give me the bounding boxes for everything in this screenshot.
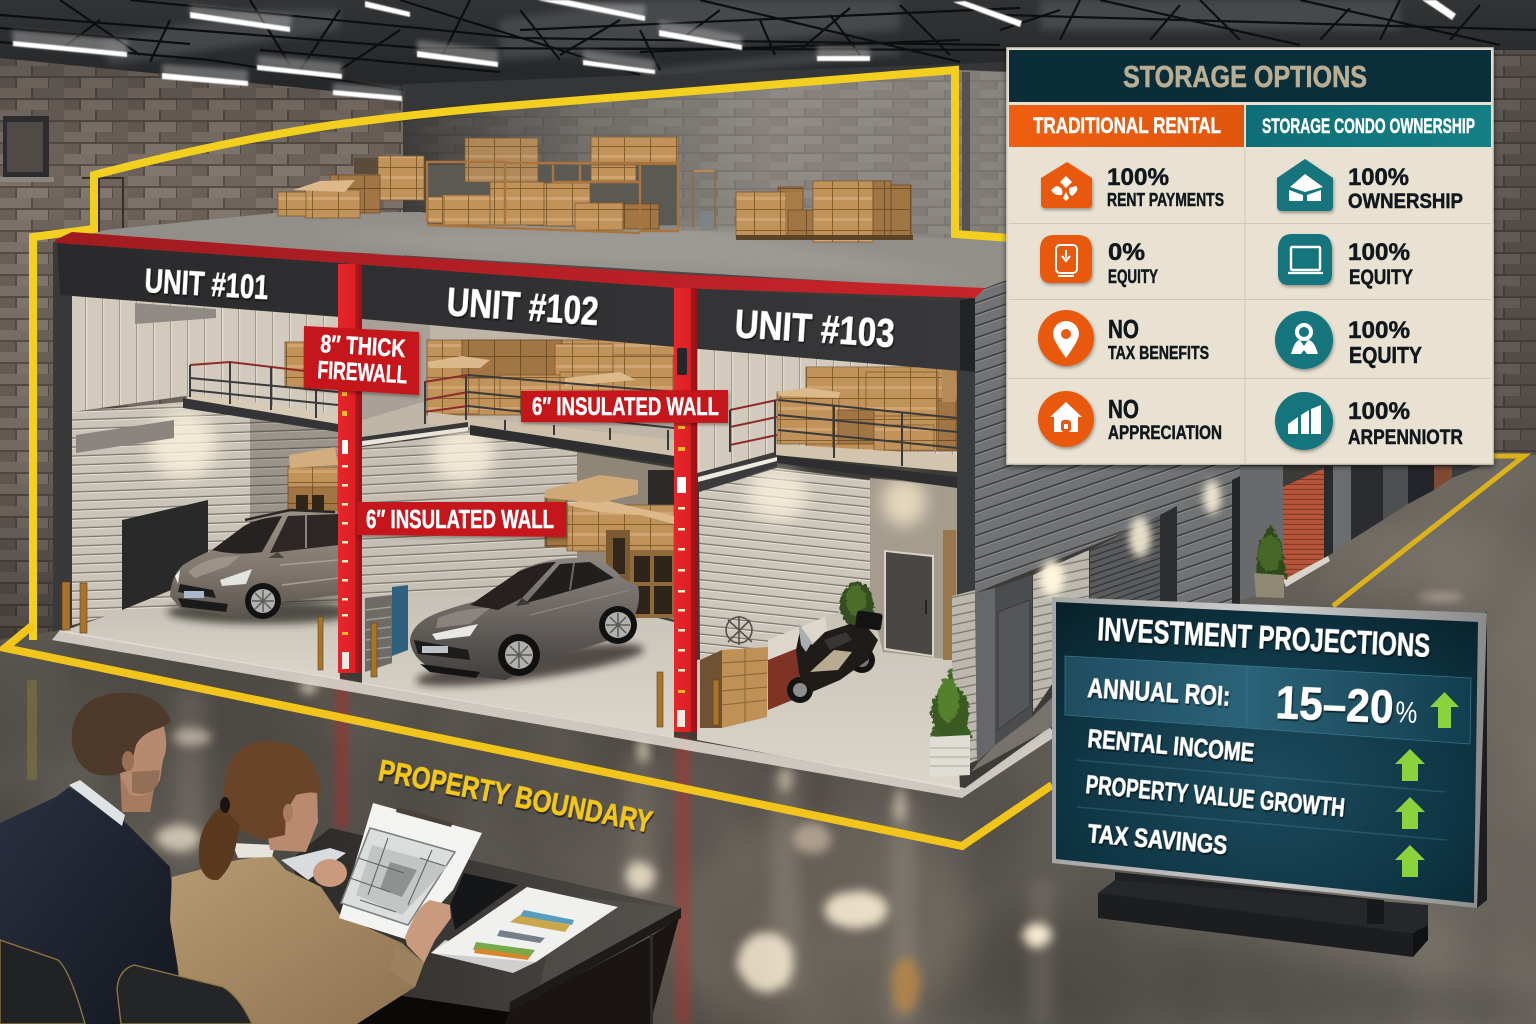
sign side edge bbox=[1477, 612, 1487, 908]
row 2 left: zero equity: EQUITY bbox=[1108, 267, 1158, 288]
unit 3 mezzanine floor bbox=[775, 444, 957, 472]
panel: storage options comparison bbox=[1007, 48, 1493, 464]
ROI percent sign: % bbox=[1395, 696, 1418, 730]
callout text line 1: 8″ THICK bbox=[320, 330, 406, 363]
bay lights bbox=[1040, 560, 1064, 596]
unit 1 car shadow bbox=[167, 600, 357, 624]
row 3 right: equity bbox=[1275, 311, 1422, 369]
tax savings label: TAX SAVINGS bbox=[1086, 818, 1229, 860]
property value growth label: PROPERTY VALUE GROWTH bbox=[1084, 769, 1346, 823]
unit 3 left beam bbox=[698, 455, 777, 492]
back wall upper level bbox=[403, 70, 1010, 240]
row 2 right: full equity: EQUITY bbox=[1349, 266, 1413, 289]
siding bay 6 bbox=[1383, 466, 1408, 520]
grey siding corner bbox=[975, 588, 995, 762]
unit 1 lower boxes and shelves bbox=[288, 447, 338, 517]
bay light 3 bbox=[1203, 480, 1221, 514]
unit label 101: UNIT #101 bbox=[144, 262, 270, 307]
icon: bar chart teal bbox=[1275, 392, 1333, 450]
man face bbox=[118, 720, 166, 796]
man neck bbox=[120, 772, 156, 812]
woman hair bbox=[224, 741, 321, 840]
wall window bbox=[0, 116, 54, 182]
row 4 left: no appreciation bbox=[1038, 391, 1222, 447]
side door bbox=[995, 575, 1032, 745]
sign screen bbox=[1056, 602, 1478, 903]
table bbox=[290, 828, 681, 1024]
unit 2 front beam bbox=[470, 425, 674, 465]
row 4 left: no appreciation: NO bbox=[1108, 394, 1139, 424]
warm central floor sheen bbox=[670, 820, 970, 1024]
row 3 left: no tax benefits: TAX BENEFITS bbox=[1108, 342, 1209, 363]
fascia right end bbox=[960, 298, 975, 372]
unit 2 back door bbox=[648, 470, 674, 510]
arrow: tax savings up bbox=[1395, 845, 1425, 877]
lower boundary bbox=[5, 625, 1052, 846]
grey floor strip under side door bbox=[971, 680, 1070, 772]
woman near arm and hand bbox=[390, 900, 451, 987]
white siding corner bbox=[952, 590, 977, 772]
panel title: STORAGE OPTIONS bbox=[1123, 59, 1367, 94]
row 1 left: rent payments bbox=[1041, 162, 1224, 210]
unit 3 side window bbox=[943, 530, 956, 660]
unit 3 back lower wall bbox=[870, 478, 957, 665]
right wall shade bbox=[1490, 50, 1536, 465]
icon: monitor teal bbox=[1278, 234, 1332, 285]
man suit bbox=[0, 787, 178, 1024]
dark roll door bbox=[1351, 466, 1383, 540]
woman bbox=[170, 741, 424, 1024]
row 4 left: no appreciation: APPRECIATION bbox=[1108, 423, 1222, 444]
steel trusses bbox=[0, 0, 1536, 90]
panel: investment projections sign bbox=[1052, 597, 1487, 957]
unit 2 blue bin bbox=[392, 585, 408, 656]
unit 3 beams bbox=[775, 455, 957, 488]
unit label 102: UNIT #102 bbox=[445, 280, 600, 334]
far orange door bbox=[1434, 466, 1452, 490]
floor sheen bbox=[300, 225, 985, 280]
siding bay 5 bbox=[1333, 466, 1351, 552]
wall shading overlay bbox=[0, 58, 403, 640]
icon: person teal bbox=[1275, 311, 1333, 369]
siding bay 3 bbox=[1177, 480, 1232, 620]
woman jacket bbox=[170, 855, 424, 1024]
upper concrete floor bbox=[60, 212, 1010, 290]
arrow: ROI up bbox=[1430, 692, 1459, 728]
arrow: rental income up bbox=[1395, 749, 1425, 781]
crates group C bbox=[736, 181, 913, 242]
lower callout text: 6″ INSULATED WALL bbox=[366, 504, 554, 534]
unit 3 railing bbox=[730, 400, 957, 466]
bollards bbox=[62, 582, 719, 727]
unit 1 mezzanine beam bbox=[183, 398, 338, 432]
unit 2 striped cabinet bbox=[365, 595, 392, 672]
sign frame bbox=[1052, 597, 1487, 908]
dark column bbox=[1160, 506, 1177, 620]
orange roll door bbox=[1283, 468, 1324, 580]
polished floor bbox=[0, 455, 1536, 1024]
small paper bbox=[281, 848, 346, 880]
right side building wall bbox=[930, 278, 1482, 777]
light tubes bbox=[13, 41, 127, 57]
small railing frame bbox=[82, 178, 123, 232]
icon: house diamonds orange bbox=[1041, 162, 1092, 208]
floor lip bbox=[52, 630, 1056, 798]
row 3 right: equity: EQUITY bbox=[1349, 342, 1422, 368]
people at table bbox=[0, 693, 681, 1024]
unit 2 railing bbox=[424, 375, 674, 450]
upper boundary bbox=[33, 70, 1010, 640]
unit 3 floor bbox=[697, 597, 960, 790]
sign base bbox=[1098, 872, 1428, 957]
floor texture bbox=[0, 455, 1536, 1024]
unit label 103: UNIT #103 bbox=[733, 302, 896, 356]
floor reflections bbox=[156, 520, 1490, 1024]
unit 2 mezzanine floor bbox=[428, 412, 674, 458]
firewall pillar 1 bbox=[338, 264, 362, 673]
entrance bush bbox=[1254, 525, 1287, 598]
woman hair tie bbox=[220, 797, 230, 813]
man ear bbox=[122, 751, 134, 771]
unit 2 interior bbox=[52, 232, 1482, 798]
column head: traditional rental bbox=[1009, 105, 1244, 147]
potted tree bbox=[930, 668, 972, 777]
side column bbox=[957, 292, 975, 596]
sign title: INVESTMENT PROJECTIONS bbox=[1097, 611, 1431, 664]
dark band above yellow line bbox=[403, 62, 1010, 122]
car 2 bbox=[410, 558, 646, 695]
crates group B with shelving bbox=[427, 137, 716, 233]
decorative band divider bbox=[1246, 667, 1248, 727]
icon: house teal bbox=[1277, 159, 1333, 211]
unit 3 white ledge bbox=[768, 617, 828, 660]
icon: device orange bbox=[1040, 235, 1092, 283]
dark left column bbox=[53, 242, 72, 632]
arrow: property value up bbox=[1395, 797, 1425, 829]
unit 1 wall plaques bbox=[135, 303, 216, 324]
faint left parking stripe bbox=[27, 680, 37, 780]
callout: 8 inch thick firewall bbox=[304, 326, 419, 395]
row 3 right: equity: 100% bbox=[1348, 317, 1410, 344]
ROI highlight band bbox=[1065, 656, 1471, 744]
lower right dark floor patch bbox=[900, 900, 1536, 1024]
column head: traditional rental: TRADITIONAL RENTAL bbox=[1033, 113, 1221, 138]
unit 1 upper wall bbox=[72, 292, 338, 430]
row 4 right: appreciation: ARPENNIOTR bbox=[1348, 426, 1463, 449]
side siding upper band bbox=[975, 278, 1240, 593]
callout text line 2: FIREWALL bbox=[317, 356, 408, 389]
upper storage level bbox=[60, 137, 1010, 290]
unit 2 wall glow bbox=[431, 427, 495, 483]
black unit fascia bbox=[57, 243, 972, 372]
unit 2 back upper bbox=[362, 318, 430, 420]
unit 3 side lower wall bbox=[699, 468, 870, 660]
bay light 2 bbox=[1129, 517, 1151, 557]
unit 3 back wall glow bbox=[882, 478, 926, 526]
light housings bbox=[12, 0, 870, 99]
man hair bbox=[72, 693, 171, 776]
unit 2 lower wall bbox=[362, 433, 577, 600]
chair right bbox=[117, 965, 252, 1024]
door bay dark bbox=[1324, 466, 1333, 558]
row 4 right: appreciation bbox=[1275, 392, 1463, 450]
unit 3 strip bbox=[698, 457, 777, 482]
unit 3 wall glow bbox=[747, 469, 807, 521]
row 1 right: ownership bbox=[1277, 159, 1463, 213]
callout: lower 6 inch insulated wall bbox=[357, 502, 566, 537]
car 1 bbox=[170, 510, 338, 619]
panel header bar bbox=[1009, 50, 1491, 102]
clipboard with blueprint bbox=[339, 803, 482, 940]
tablet bbox=[450, 873, 518, 930]
column head: storage condo ownership bbox=[1246, 105, 1491, 147]
unit 1 railing bbox=[190, 362, 338, 418]
firewall pillar 2 bbox=[674, 288, 697, 732]
unit 2 lower boxes and shelves bbox=[545, 475, 674, 618]
unit 1 wall glow bbox=[149, 411, 217, 479]
woman collar bbox=[232, 843, 275, 858]
lighter roof panels bbox=[100, 0, 1400, 80]
red parapet bbox=[55, 232, 985, 298]
unit 1 mezzanine boxes bbox=[285, 342, 304, 387]
icon: house circle orange bbox=[1038, 391, 1094, 447]
unit 3 red wall base bbox=[768, 634, 800, 710]
row 3 left: no tax benefits: NO bbox=[1108, 314, 1139, 344]
light curb bbox=[1283, 556, 1330, 587]
callout: upper 6 inch insulated wall bbox=[521, 390, 728, 423]
far door bbox=[1408, 466, 1434, 504]
chair left bbox=[0, 940, 85, 1024]
unit 3 door bbox=[884, 550, 934, 657]
motorcycle bbox=[787, 610, 883, 703]
floor label: property boundary: PROPERTY BOUNDARY bbox=[376, 753, 656, 839]
ROI value: 15–20 bbox=[1275, 676, 1395, 733]
unit 3 bush bbox=[840, 582, 874, 628]
red firewall pillars bbox=[62, 264, 719, 732]
man bbox=[0, 693, 178, 1024]
unit 3 wood crate bbox=[700, 647, 768, 728]
woman ear bbox=[283, 804, 293, 822]
row 3 left: no tax benefits bbox=[1038, 310, 1209, 366]
ceiling lights bbox=[12, 0, 1456, 101]
row 1 right: ownership: 100% bbox=[1348, 164, 1409, 191]
unit 3 wire rack bbox=[726, 616, 752, 645]
row 1 left: rent payments: 100% bbox=[1107, 164, 1169, 191]
unit 1 lower wall bbox=[72, 402, 338, 625]
man stubble bbox=[132, 770, 160, 794]
siding bay 4 bbox=[1240, 466, 1283, 600]
row 4 right: appreciation: 100% bbox=[1348, 398, 1410, 425]
row 2 left: zero equity bbox=[1040, 235, 1158, 288]
annual ROI label: ANNUAL ROI: bbox=[1087, 672, 1231, 712]
woman ponytail bbox=[199, 806, 240, 880]
roof fascia bbox=[55, 232, 985, 372]
row 2 left: zero equity: 0% bbox=[1108, 239, 1145, 266]
rental income label: RENTAL INCOME bbox=[1086, 723, 1255, 768]
upper callout text: 6″ INSULATED WALL bbox=[532, 393, 719, 421]
unit 1 shade bbox=[250, 412, 338, 610]
unit 3 mezzanine boxes bbox=[777, 367, 957, 451]
unit 2 white strip bbox=[362, 427, 468, 446]
unit 3 interior bbox=[52, 348, 1056, 798]
roll door bay bbox=[1090, 515, 1160, 640]
woman neck and cheek bbox=[262, 790, 318, 852]
corner pillar stripe bbox=[962, 72, 970, 232]
far end bbox=[1452, 466, 1482, 478]
icon: map pin orange bbox=[1038, 310, 1094, 366]
unit 2 beams bbox=[362, 422, 468, 447]
far right brick wall bbox=[1490, 50, 1536, 465]
back wall shadow bbox=[403, 70, 1010, 240]
white siding bay bbox=[1033, 550, 1089, 712]
unit 1 floor bbox=[60, 603, 340, 680]
warehouse background bbox=[0, 0, 1536, 640]
row 1 left: rent payments: RENT PAYMENTS bbox=[1107, 189, 1224, 210]
row 1 right: ownership: OWNERSHIP bbox=[1348, 190, 1463, 213]
unit 2 upper wall bbox=[362, 318, 674, 458]
crates group A bbox=[278, 156, 424, 218]
yellow property boundary line bbox=[5, 70, 1524, 846]
unit 2 mezzanine boxes bbox=[427, 340, 674, 415]
woman far hand bbox=[313, 859, 347, 887]
ground plane bbox=[0, 455, 1536, 1024]
unit 1 roll door bbox=[122, 500, 208, 610]
row 2 right: full equity: 100% bbox=[1348, 239, 1410, 266]
right diagonal boundary bbox=[1333, 456, 1524, 606]
row 2 right: full equity bbox=[1278, 234, 1413, 289]
column 2 bbox=[1232, 476, 1240, 606]
unit 2 floor bbox=[362, 590, 674, 738]
brick side wall bbox=[0, 58, 403, 640]
report with charts bbox=[431, 887, 618, 973]
unit 3 upper wall bbox=[697, 348, 960, 473]
man collar bbox=[69, 780, 125, 826]
unit 1 mezzanine floor bbox=[185, 393, 338, 428]
unit 2 back room bbox=[577, 452, 674, 620]
panel background bbox=[1007, 48, 1493, 464]
table grid lines bbox=[1009, 150, 1491, 463]
ceiling bbox=[0, 0, 1536, 110]
